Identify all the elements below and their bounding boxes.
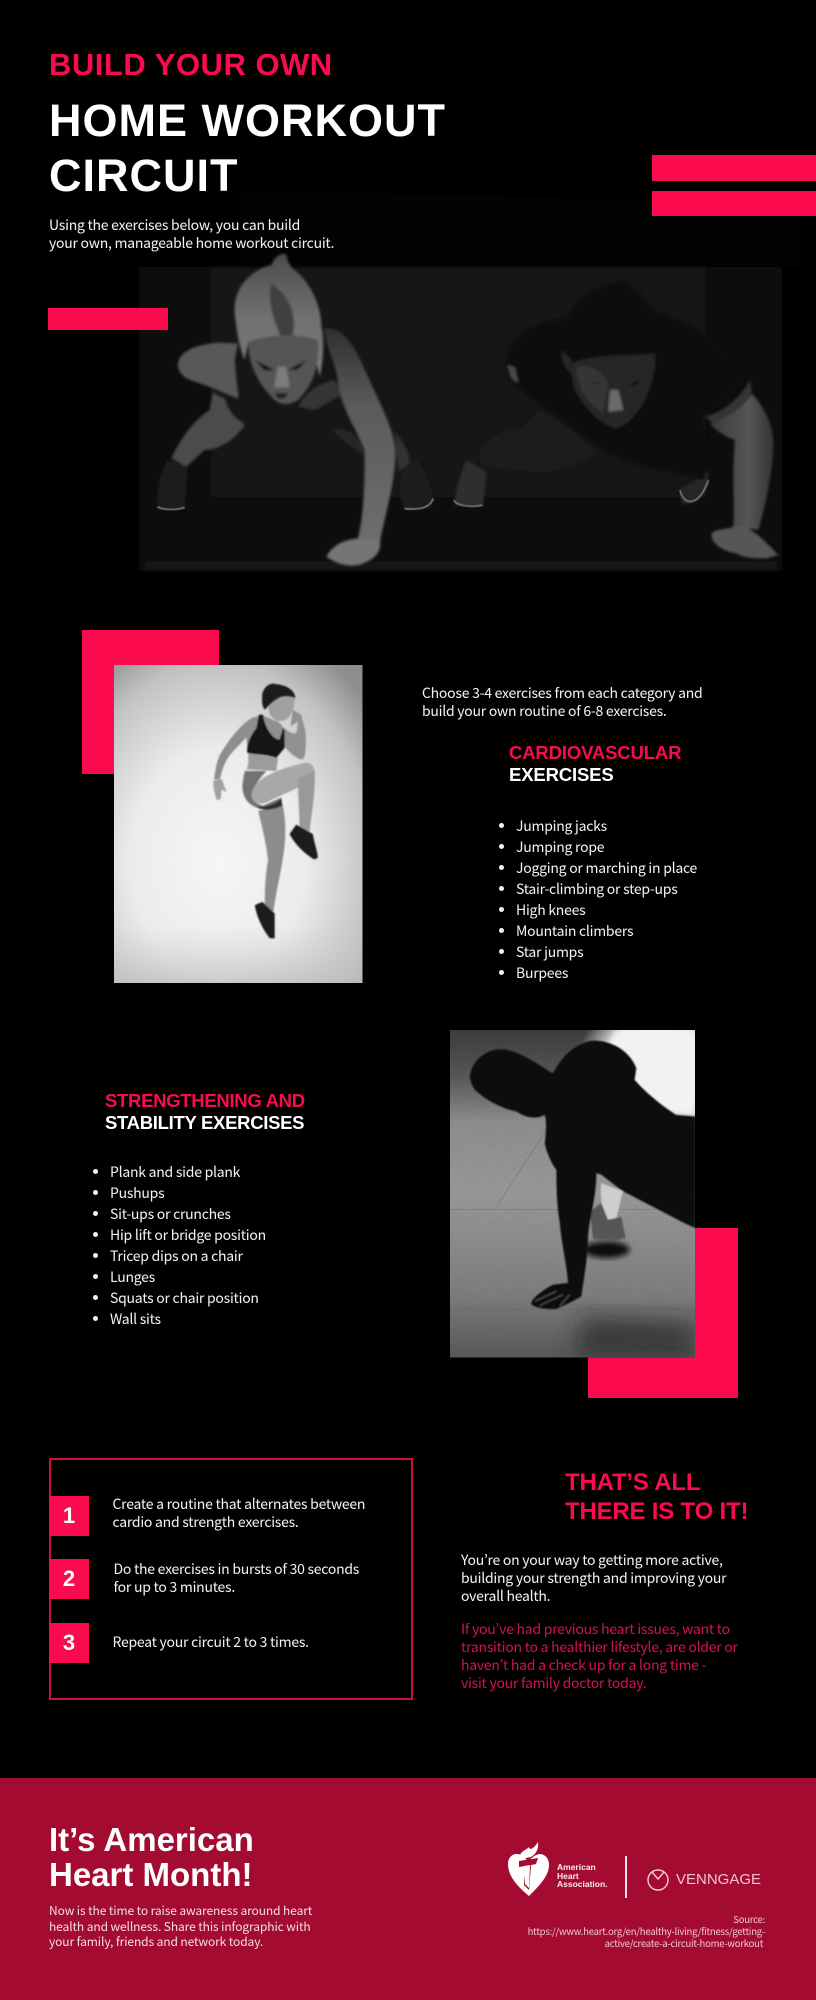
footer text [49, 1902, 312, 1950]
decorative block behind jumping photo [82, 630, 219, 774]
logo text: american heart association: Association. [557, 1879, 608, 1889]
warning text: visit your family doctor today. [461, 1673, 646, 1693]
list: cardiovascular exercises: Jumping jacks [516, 816, 607, 836]
list: cardiovascular exercises: Stair-climbing or step-ups [516, 879, 678, 899]
intro text: Choose 3-4 exercises from each category and [422, 683, 702, 703]
list: strengthening exercises: Plank and side plank [110, 1162, 240, 1182]
list: strengthening exercises: Sit-ups or crunches [110, 1204, 231, 1224]
step 3 number [49, 1623, 89, 1663]
decorative block behind plank photo [588, 1228, 738, 1398]
decorative bar: left of hero [48, 308, 168, 330]
title line: home workout circuit: HOME WORKOUT [49, 95, 446, 146]
step 3 text: Repeat your circuit 2 to 3 times. [112, 1632, 309, 1652]
step 2 text: for up to 3 minutes. [114, 1577, 235, 1597]
list: cardiovascular exercises: Jumping rope [516, 837, 604, 857]
list: cardiovascular exercises: High knees [516, 900, 585, 920]
divider [625, 1856, 627, 1898]
warning text: If you’ve had previous heart issues, want to [461, 1619, 730, 1639]
heading: that's all there is to it: THAT’S ALL [565, 1469, 700, 1496]
decorative bar: top right upper [652, 155, 816, 181]
step 3 number: 3 [63, 1630, 75, 1655]
subtitle [49, 215, 334, 253]
list: cardiovascular exercises [499, 816, 697, 983]
step 1 number [49, 1496, 89, 1536]
step 2 text [114, 1559, 359, 1597]
photo: man and woman doing pushups [139, 252, 782, 572]
title line: home workout circuit: CIRCUIT [49, 150, 238, 201]
source text: active/create-a-circuit-home-workout [605, 1936, 763, 1950]
panel: footer [0, 1778, 816, 2000]
heading: cardiovascular exercises: EXERCISES [509, 764, 614, 785]
closing text: building your strength and improving your [461, 1568, 726, 1588]
list: cardiovascular exercises: Mountain climbers [516, 921, 633, 941]
list: strengthening exercises: Wall sits [110, 1309, 161, 1329]
heading: cardiovascular exercises: CARDIOVASCULAR [509, 742, 681, 763]
heading: strengthening and stability exercises: STRENGTHENING AND [105, 1090, 305, 1111]
heading: that's all there is to it: THERE IS TO IT! [565, 1498, 748, 1525]
closing text [461, 1550, 727, 1606]
step 2 number: 2 [63, 1566, 75, 1591]
step 1 text: cardio and strength exercises. [112, 1512, 299, 1532]
list: strengthening exercises: Pushups [110, 1183, 164, 1203]
icon: venngage logo [647, 1869, 669, 1891]
logo text: venngage: VENNGAGE [676, 1871, 761, 1888]
footer heading [49, 1821, 254, 1893]
list: strengthening exercises [93, 1162, 266, 1329]
source text: Source: [733, 1912, 765, 1926]
heading: that's all there is to it [565, 1469, 748, 1525]
warning text: haven’t had a check up for a long time - [461, 1655, 706, 1675]
list: cardiovascular exercises: Star jumps [516, 942, 583, 962]
source text: https://www.heart.org/en/healthy-living/fitness/getting- [528, 1924, 765, 1938]
footer heading: It’s American [49, 1821, 254, 1858]
source text [528, 1912, 765, 1950]
decorative bar: top right lower [652, 191, 816, 216]
step 2 text: Do the exercises in bursts of 30 seconds [114, 1559, 359, 1579]
closing text: overall health. [461, 1586, 550, 1606]
intro text [422, 683, 702, 721]
footer text: Now is the time to raise awareness around heart [49, 1902, 312, 1919]
footer heading: Heart Month! [49, 1856, 252, 1893]
step 1 number: 1 [63, 1503, 75, 1528]
photo: woman jumping [114, 665, 362, 983]
logo text: american heart association: Heart [557, 1871, 579, 1881]
list: strengthening exercises: Tricep dips on a chair [110, 1246, 243, 1266]
list: strengthening exercises: Lunges [110, 1267, 155, 1287]
list: strengthening exercises: Hip lift or bridge position [110, 1225, 266, 1245]
footer text: your family, friends and network today. [49, 1933, 263, 1950]
logo text: american heart association: American [557, 1862, 596, 1872]
footer text: health and wellness. Share this infographic with [49, 1918, 311, 1935]
subtitle: your own, manageable home workout circuit. [49, 233, 334, 253]
title line: build your own: BUILD YOUR OWN [49, 47, 333, 82]
list: cardiovascular exercises: Jogging or marching in place [516, 858, 697, 878]
title [49, 47, 446, 201]
list: cardiovascular exercises: Burpees [516, 963, 568, 983]
title line: home workout circuit [49, 95, 446, 201]
heading: cardiovascular exercises [509, 742, 681, 785]
warning text [461, 1619, 738, 1693]
list: strengthening exercises: Squats or chair position [110, 1288, 259, 1308]
closing text: You’re on your way to getting more active, [461, 1550, 723, 1570]
step 2 number [49, 1559, 89, 1599]
step 1 text [112, 1494, 365, 1532]
panel: steps box [49, 1458, 413, 1700]
step 1 text: Create a routine that alternates between [112, 1494, 365, 1514]
logo text: american heart association [557, 1862, 608, 1889]
intro text: build your own routine of 6-8 exercises. [422, 701, 667, 721]
warning text: transition to a healthier lifestyle, are older or [461, 1637, 738, 1657]
heading: strengthening and stability exercises [105, 1090, 305, 1133]
subtitle: Using the exercises below, you can build [49, 215, 300, 235]
heading: strengthening and stability exercises: STABILITY EXERCISES [105, 1112, 304, 1133]
photo: man in plank [450, 1030, 695, 1358]
icon: american heart association logo [508, 1842, 549, 1896]
